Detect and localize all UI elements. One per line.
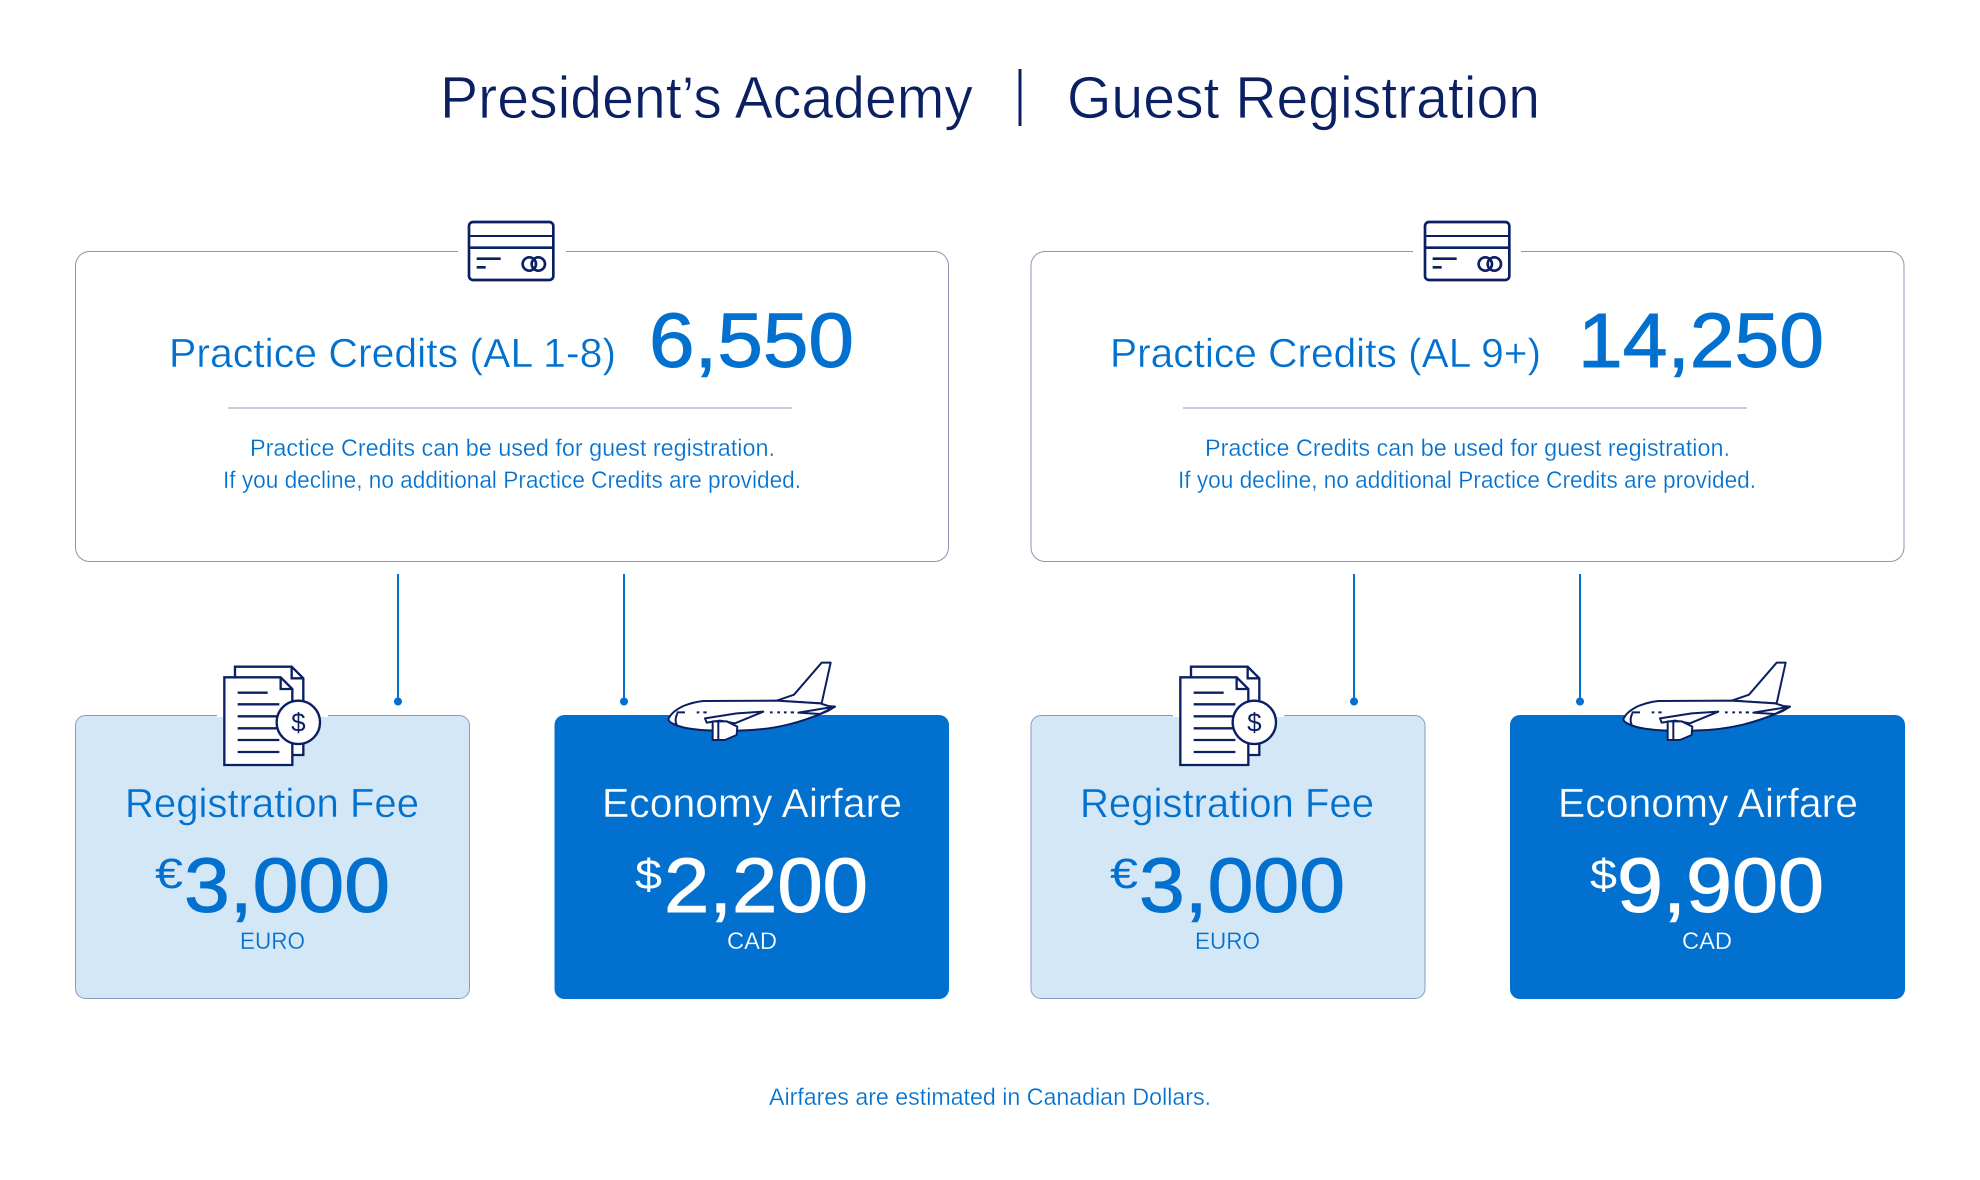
amount: dollar 9,900: 9,900 <box>1617 843 1824 929</box>
connector: airfare right <box>1576 574 1584 706</box>
amount: euro 3,000: € <box>155 850 183 898</box>
amount: dollar 2,200: 2,200 <box>664 843 868 929</box>
text block: description <box>223 435 801 494</box>
heading: practice credits AL 1-8: Practice Credits (AL 1-8) <box>169 330 616 376</box>
label: registration fee: Registration Fee <box>1080 780 1374 826</box>
panel: practice credits AL 1-8 <box>76 222 948 562</box>
label: economy airfare: Economy Airfare <box>602 780 902 826</box>
label: CAD: CAD <box>727 928 777 955</box>
label: euro: EURO <box>240 928 305 955</box>
connector: airfare left <box>620 574 628 706</box>
icon: document with dollar: $ <box>291 708 306 738</box>
text block: description <box>1178 435 1756 494</box>
amount: dollar 2,200: $ <box>635 851 662 899</box>
title <box>440 65 1540 131</box>
icon: airplane <box>668 663 835 740</box>
panel: economy airfare right <box>1510 663 1905 999</box>
icon: document with dollar: $ <box>1247 708 1262 738</box>
title: Guest Registration <box>1067 65 1540 131</box>
label: registration fee: Registration Fee <box>125 780 419 826</box>
number: 14,250: 14,250 <box>1578 298 1824 384</box>
label: euro: EURO <box>1195 928 1260 955</box>
panel: registration fee left <box>76 667 470 998</box>
icon: airplane <box>1623 663 1790 740</box>
text block: description: Practice Credits can be used for guest registration. <box>250 435 775 462</box>
panel: practice credits AL 9+ <box>1031 222 1904 562</box>
icon: credit card <box>1425 222 1509 280</box>
icon: credit card <box>469 222 553 280</box>
connector: registration fee left <box>394 574 402 706</box>
label: economy airfare: Economy Airfare <box>1558 780 1858 826</box>
icon: document with dollar <box>1180 667 1276 765</box>
text block: description: If you decline, no additional Practice Credits are provided. <box>1178 467 1756 494</box>
text block: description: If you decline, no additional Practice Credits are provided. <box>223 467 801 494</box>
number: 6,550: 6,550 <box>649 298 854 384</box>
footnote: Airfares are estimated in Canadian Dollars. <box>769 1084 1211 1111</box>
amount: euro 3,000: € <box>1110 850 1138 898</box>
heading: practice credits AL 9+: Practice Credits (AL 9+) <box>1110 330 1541 376</box>
panel: registration fee right <box>1031 667 1425 998</box>
title: President’s Academy <box>440 65 973 131</box>
panel: economy airfare left <box>554 663 949 999</box>
label: CAD: CAD <box>1682 928 1732 955</box>
connector: registration fee right <box>1350 574 1358 706</box>
amount: dollar 9,900: $ <box>1590 851 1617 899</box>
text block: description: Practice Credits can be used for guest registration. <box>1205 435 1730 462</box>
amount: euro 3,000: 3,000 <box>184 843 390 929</box>
icon: document with dollar <box>224 667 320 765</box>
amount: euro 3,000: 3,000 <box>1139 843 1345 929</box>
